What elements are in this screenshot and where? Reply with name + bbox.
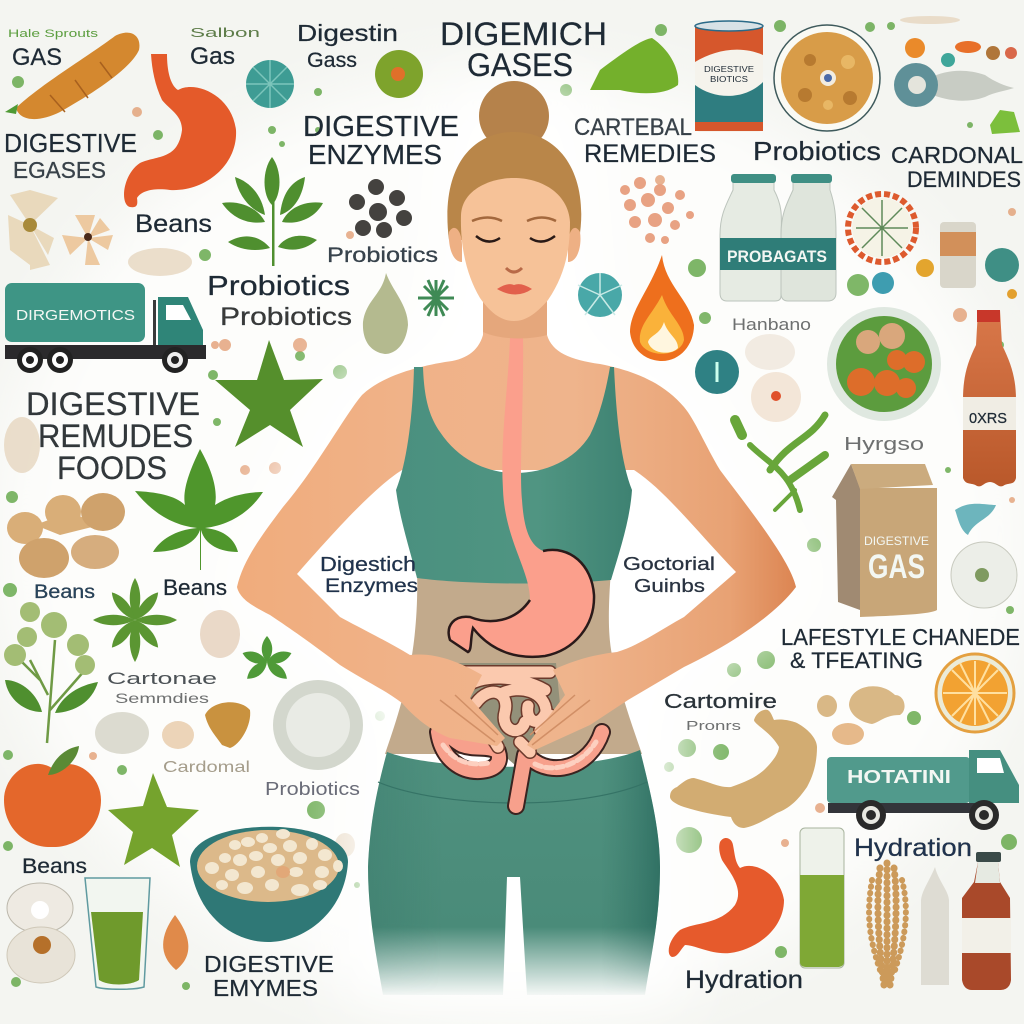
hair bun bbox=[479, 81, 549, 151]
label: probiotics middle: Probiotics bbox=[327, 244, 438, 267]
eyebrows bbox=[472, 218, 556, 221]
icon: teal flower center right bbox=[578, 273, 622, 317]
label: digestin gass: Gass bbox=[307, 49, 357, 72]
hair bbox=[447, 132, 581, 240]
label: cartebal remedies: CARTEBAL bbox=[574, 114, 692, 141]
label: goctorial guinbs: Goctorial bbox=[623, 554, 715, 574]
label: cardonal demindes: CARDONAL bbox=[891, 142, 1023, 168]
icon: orange slice bbox=[936, 654, 1014, 732]
label: beans center: Beans bbox=[163, 575, 227, 600]
label: digestive emymes: EMYMES bbox=[213, 975, 318, 1001]
icon: herb sketch bbox=[95, 712, 149, 754]
icon: milk bottles bbox=[720, 174, 836, 301]
label: digestive enzymes bbox=[303, 111, 459, 170]
icon: white powder disc bbox=[273, 680, 363, 770]
icon: white shell bbox=[751, 372, 801, 422]
icon: dark seeds bbox=[349, 179, 412, 238]
label: hanbano: Hanbano bbox=[732, 315, 811, 334]
label: goctorial guinbs: Guinbs bbox=[634, 576, 705, 596]
label: beans left: Beans bbox=[34, 582, 95, 603]
icon: can: BIOTICS bbox=[710, 75, 748, 84]
label: cartonae semmdies: Semmdies bbox=[115, 690, 209, 706]
heading: Digemich Gases: DIGEMICH bbox=[440, 16, 607, 52]
label: cartonae semmdies bbox=[107, 669, 217, 706]
icon: green leaves top bbox=[590, 38, 678, 93]
icon: orange herb bbox=[163, 915, 188, 970]
icon: brown bottle bbox=[962, 852, 1011, 990]
icon: paper bag: GAS bbox=[868, 548, 925, 586]
label: beans lower: Beans bbox=[22, 855, 87, 878]
icon: star leaf left bbox=[215, 340, 323, 447]
label: small salbon: Salbon bbox=[190, 25, 260, 40]
icon: green leaf cluster bbox=[241, 636, 293, 683]
icon: stomach top bbox=[124, 54, 236, 207]
icon: pale pod bbox=[363, 273, 408, 354]
label: digestin gass bbox=[297, 20, 398, 72]
label: beans upper: Beans bbox=[135, 210, 212, 238]
label: probiotics lower: Probiotics bbox=[265, 779, 360, 799]
icon: can bbox=[695, 21, 763, 132]
icon: pale shell upper bbox=[745, 334, 795, 370]
label: digestin gass: Digestin bbox=[297, 20, 398, 46]
finger lines bbox=[440, 695, 590, 745]
label: digestive remudes foods: DIGESTIVE bbox=[26, 386, 200, 422]
label: hyrgso: Hyrgso bbox=[844, 434, 924, 454]
icon: stomach bottom bbox=[669, 838, 784, 957]
icon: milk bottles: PROBAGATS bbox=[727, 247, 827, 266]
arms and chest bbox=[237, 295, 796, 750]
icon: paper bag: DIGESTIVE bbox=[864, 534, 929, 548]
icon: white bottle bbox=[921, 867, 949, 985]
icon: delivery truck left: DIRGEMOTICS bbox=[16, 307, 135, 324]
label: probiotics top: Probiotics bbox=[753, 136, 881, 166]
icon: grain stalks bbox=[869, 863, 906, 985]
lips bbox=[497, 284, 532, 294]
label: digestive emymes: DIGESTIVE bbox=[204, 951, 334, 977]
tank top bbox=[396, 367, 632, 584]
icon: paper bag bbox=[832, 464, 937, 617]
icon: glass bowl left bbox=[7, 883, 75, 983]
label: digestich enzymes: Digestich bbox=[320, 554, 416, 576]
icon: teal disc bbox=[695, 350, 739, 394]
label: digestich enzymes: Enzymes bbox=[325, 576, 418, 597]
icon: star leaf lower bbox=[108, 773, 199, 867]
label: cartonae semmdies: Cartonae bbox=[107, 669, 217, 688]
midriff bbox=[385, 570, 642, 754]
icon: green flower bbox=[375, 50, 423, 98]
icon: white flower left bbox=[8, 190, 58, 270]
icon: small colored dots bbox=[872, 259, 1017, 299]
icon: teal blob right bbox=[985, 248, 1019, 282]
label: hydration right: Hydration bbox=[854, 834, 972, 862]
label: digestive remudes foods: REMUDES bbox=[38, 418, 193, 454]
icon: ginger root bbox=[817, 686, 905, 745]
icon: sweet potato bbox=[5, 33, 139, 119]
icon: teal leaves bbox=[955, 504, 996, 535]
icon: green spiky plant bbox=[418, 280, 454, 316]
icon: delivery truck left bbox=[5, 283, 206, 373]
label: gas right: Gas bbox=[190, 43, 235, 70]
icon: top right small fruits bbox=[905, 38, 1017, 67]
label: probiotics double: Probiotics bbox=[220, 303, 352, 331]
icon: soda bottle: 0XRS bbox=[969, 410, 1007, 427]
icon: ginger roots bbox=[7, 493, 125, 578]
label: digestive enzymes: ENZYMES bbox=[308, 139, 442, 170]
icon: big green leaf bbox=[135, 449, 263, 570]
icon: teal flower bbox=[246, 60, 294, 108]
label: cardonal demindes: DEMINDES bbox=[907, 167, 1021, 192]
label: cartebal remedies: REMEDIES bbox=[584, 140, 716, 168]
icon: pale shell bbox=[200, 610, 240, 658]
label: digestive egases: EGASES bbox=[13, 157, 106, 183]
label: cardomal: Cardomal bbox=[163, 759, 250, 776]
stomach and esophagus bbox=[449, 338, 594, 657]
label: cartomire: Pronrs bbox=[686, 718, 742, 733]
icon: tan flower bbox=[62, 215, 113, 265]
icon: flame bbox=[630, 255, 694, 361]
icon: food bowl bbox=[774, 25, 880, 131]
label: gas: GAS bbox=[12, 44, 62, 71]
label: digestive remudes foods bbox=[26, 386, 200, 486]
label: probiotics double: Probiotics bbox=[207, 270, 350, 301]
heading: Digemich Gases bbox=[440, 16, 607, 83]
label: digestive egases bbox=[4, 128, 137, 183]
icon: white textured ball bbox=[951, 542, 1017, 608]
icon: herb plant top bbox=[222, 157, 323, 266]
icon: apple bbox=[4, 746, 101, 847]
icon: salad bowl bbox=[827, 307, 941, 421]
icon: seeds sketch bbox=[162, 721, 194, 749]
nose bbox=[506, 268, 522, 272]
icon: green juice glass bbox=[85, 878, 150, 989]
icon: star plant left bbox=[93, 578, 177, 662]
label: lifestyle change: & TFEATING bbox=[790, 648, 923, 673]
figure halo bbox=[220, 90, 820, 1000]
label: lifestyle change bbox=[781, 624, 1020, 673]
icon: jar bbox=[940, 222, 976, 288]
label: digestive emymes bbox=[204, 951, 334, 1001]
intestines bbox=[438, 663, 602, 806]
icon: dried leaf bbox=[205, 702, 250, 748]
label: cartomire bbox=[664, 691, 777, 733]
label: cartebal remedies bbox=[574, 114, 716, 168]
icon: herb bunch right bbox=[735, 415, 825, 510]
label: digestive egases: DIGESTIVE bbox=[4, 128, 137, 158]
icon: green leaf right bbox=[990, 110, 1020, 134]
icon: spoon tool bbox=[894, 63, 1014, 107]
label: probiotics double bbox=[207, 270, 352, 331]
ears bbox=[449, 228, 580, 262]
label: small top left: Hale Sprouts bbox=[8, 28, 99, 40]
neck shadow bbox=[483, 295, 547, 338]
label: digestive remudes foods: FOODS bbox=[57, 450, 167, 486]
label: digestive enzymes: DIGESTIVE bbox=[303, 111, 459, 143]
woman figure bbox=[220, 81, 820, 1000]
icon: orange seeds cluster bbox=[620, 177, 694, 244]
face bbox=[461, 178, 570, 321]
icon: green smoothie jar bbox=[800, 828, 844, 968]
icon: teal truck: HOTATINI bbox=[847, 767, 951, 787]
heading: Digemich Gases: GASES bbox=[467, 47, 573, 83]
icon: large ginger stomach bbox=[670, 710, 817, 828]
icon: bean bowl bbox=[190, 827, 348, 942]
leggings bbox=[368, 750, 660, 995]
icon: teal truck bbox=[827, 750, 1019, 830]
closed eyes bbox=[476, 236, 555, 242]
label: digestich enzymes bbox=[320, 554, 418, 597]
icon: can: DIGESTIVE bbox=[704, 65, 754, 74]
label: goctorial guinbs bbox=[623, 554, 715, 596]
label: lifestyle change: LAFESTYLE CHANEDE bbox=[781, 624, 1020, 650]
label: cartomire: Cartomire bbox=[664, 691, 777, 713]
label: hydration bottom: Hydration bbox=[685, 966, 803, 994]
label: cardonal demindes bbox=[891, 142, 1023, 192]
icon: flowering herb bbox=[4, 602, 98, 743]
icon: soda bottle bbox=[963, 310, 1016, 486]
icon: radial food plate bbox=[848, 194, 916, 262]
